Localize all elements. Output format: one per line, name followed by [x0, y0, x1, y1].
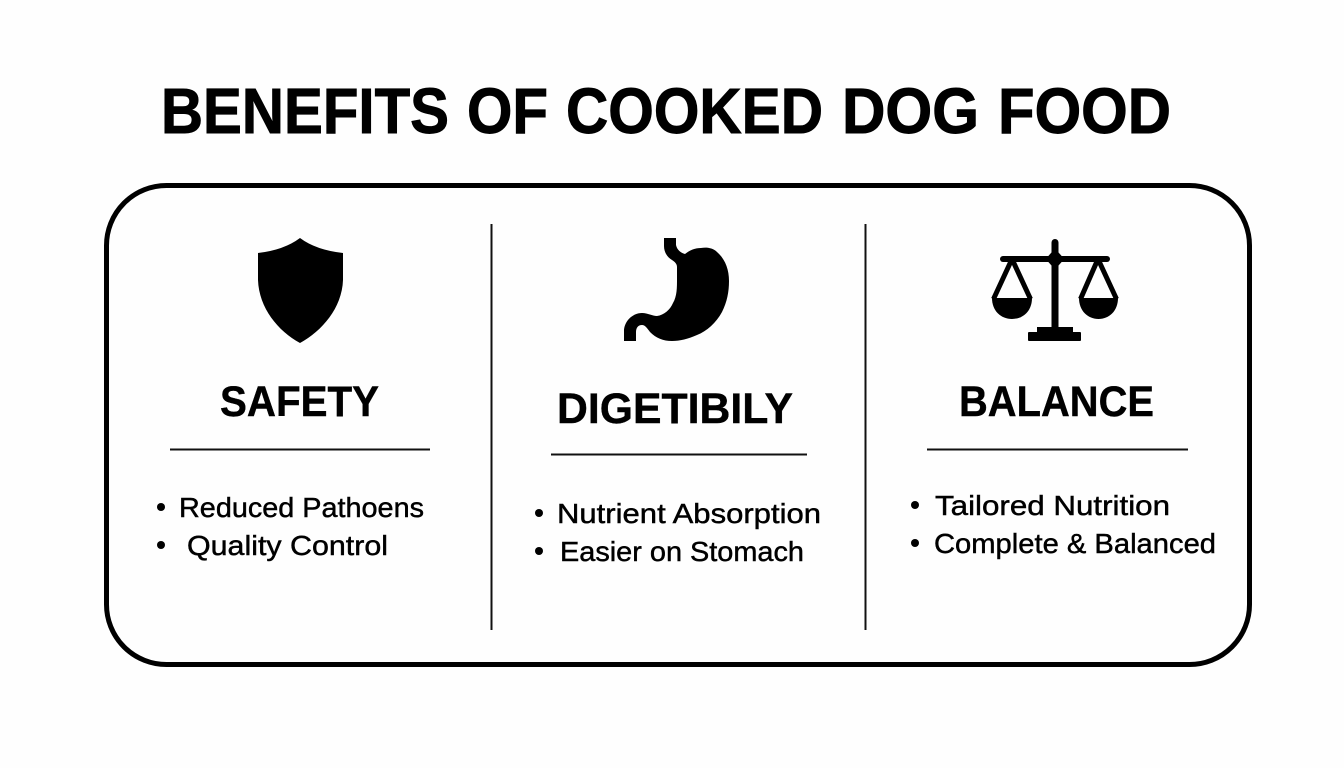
list: balance points: Tailored Nutrition	[935, 490, 1170, 521]
title: BENEFITS	[161, 75, 449, 147]
title: COOKED	[566, 75, 823, 147]
list: balance points	[911, 490, 1216, 559]
icon: stomach	[624, 238, 729, 341]
icon: scales	[992, 239, 1118, 341]
title: OF	[467, 75, 548, 147]
list: balance points: Complete & Balanced	[934, 528, 1216, 559]
heading: safety: SAFETY	[220, 378, 379, 426]
list: safety points: Reduced Pathoens	[179, 492, 424, 523]
title: FOOD	[998, 75, 1171, 147]
heading: balance: BALANCE	[959, 378, 1154, 426]
list: digestibility points: Nutrient Absorption	[557, 498, 821, 529]
panel: safety	[157, 238, 430, 561]
heading: digestibility: DIGETIBILY	[557, 385, 793, 433]
icon: shield	[258, 238, 343, 343]
list: digestibility points: Easier on Stomach	[560, 536, 804, 567]
list: safety points: Quality Control	[187, 530, 388, 561]
list: safety points	[157, 492, 424, 561]
panel: balance	[911, 239, 1216, 559]
panel: benefits frame	[106, 186, 1250, 664]
title: DOG	[842, 75, 979, 147]
title	[161, 75, 1171, 147]
panel: digestibility	[535, 238, 821, 567]
list: digestibility points	[535, 498, 821, 567]
